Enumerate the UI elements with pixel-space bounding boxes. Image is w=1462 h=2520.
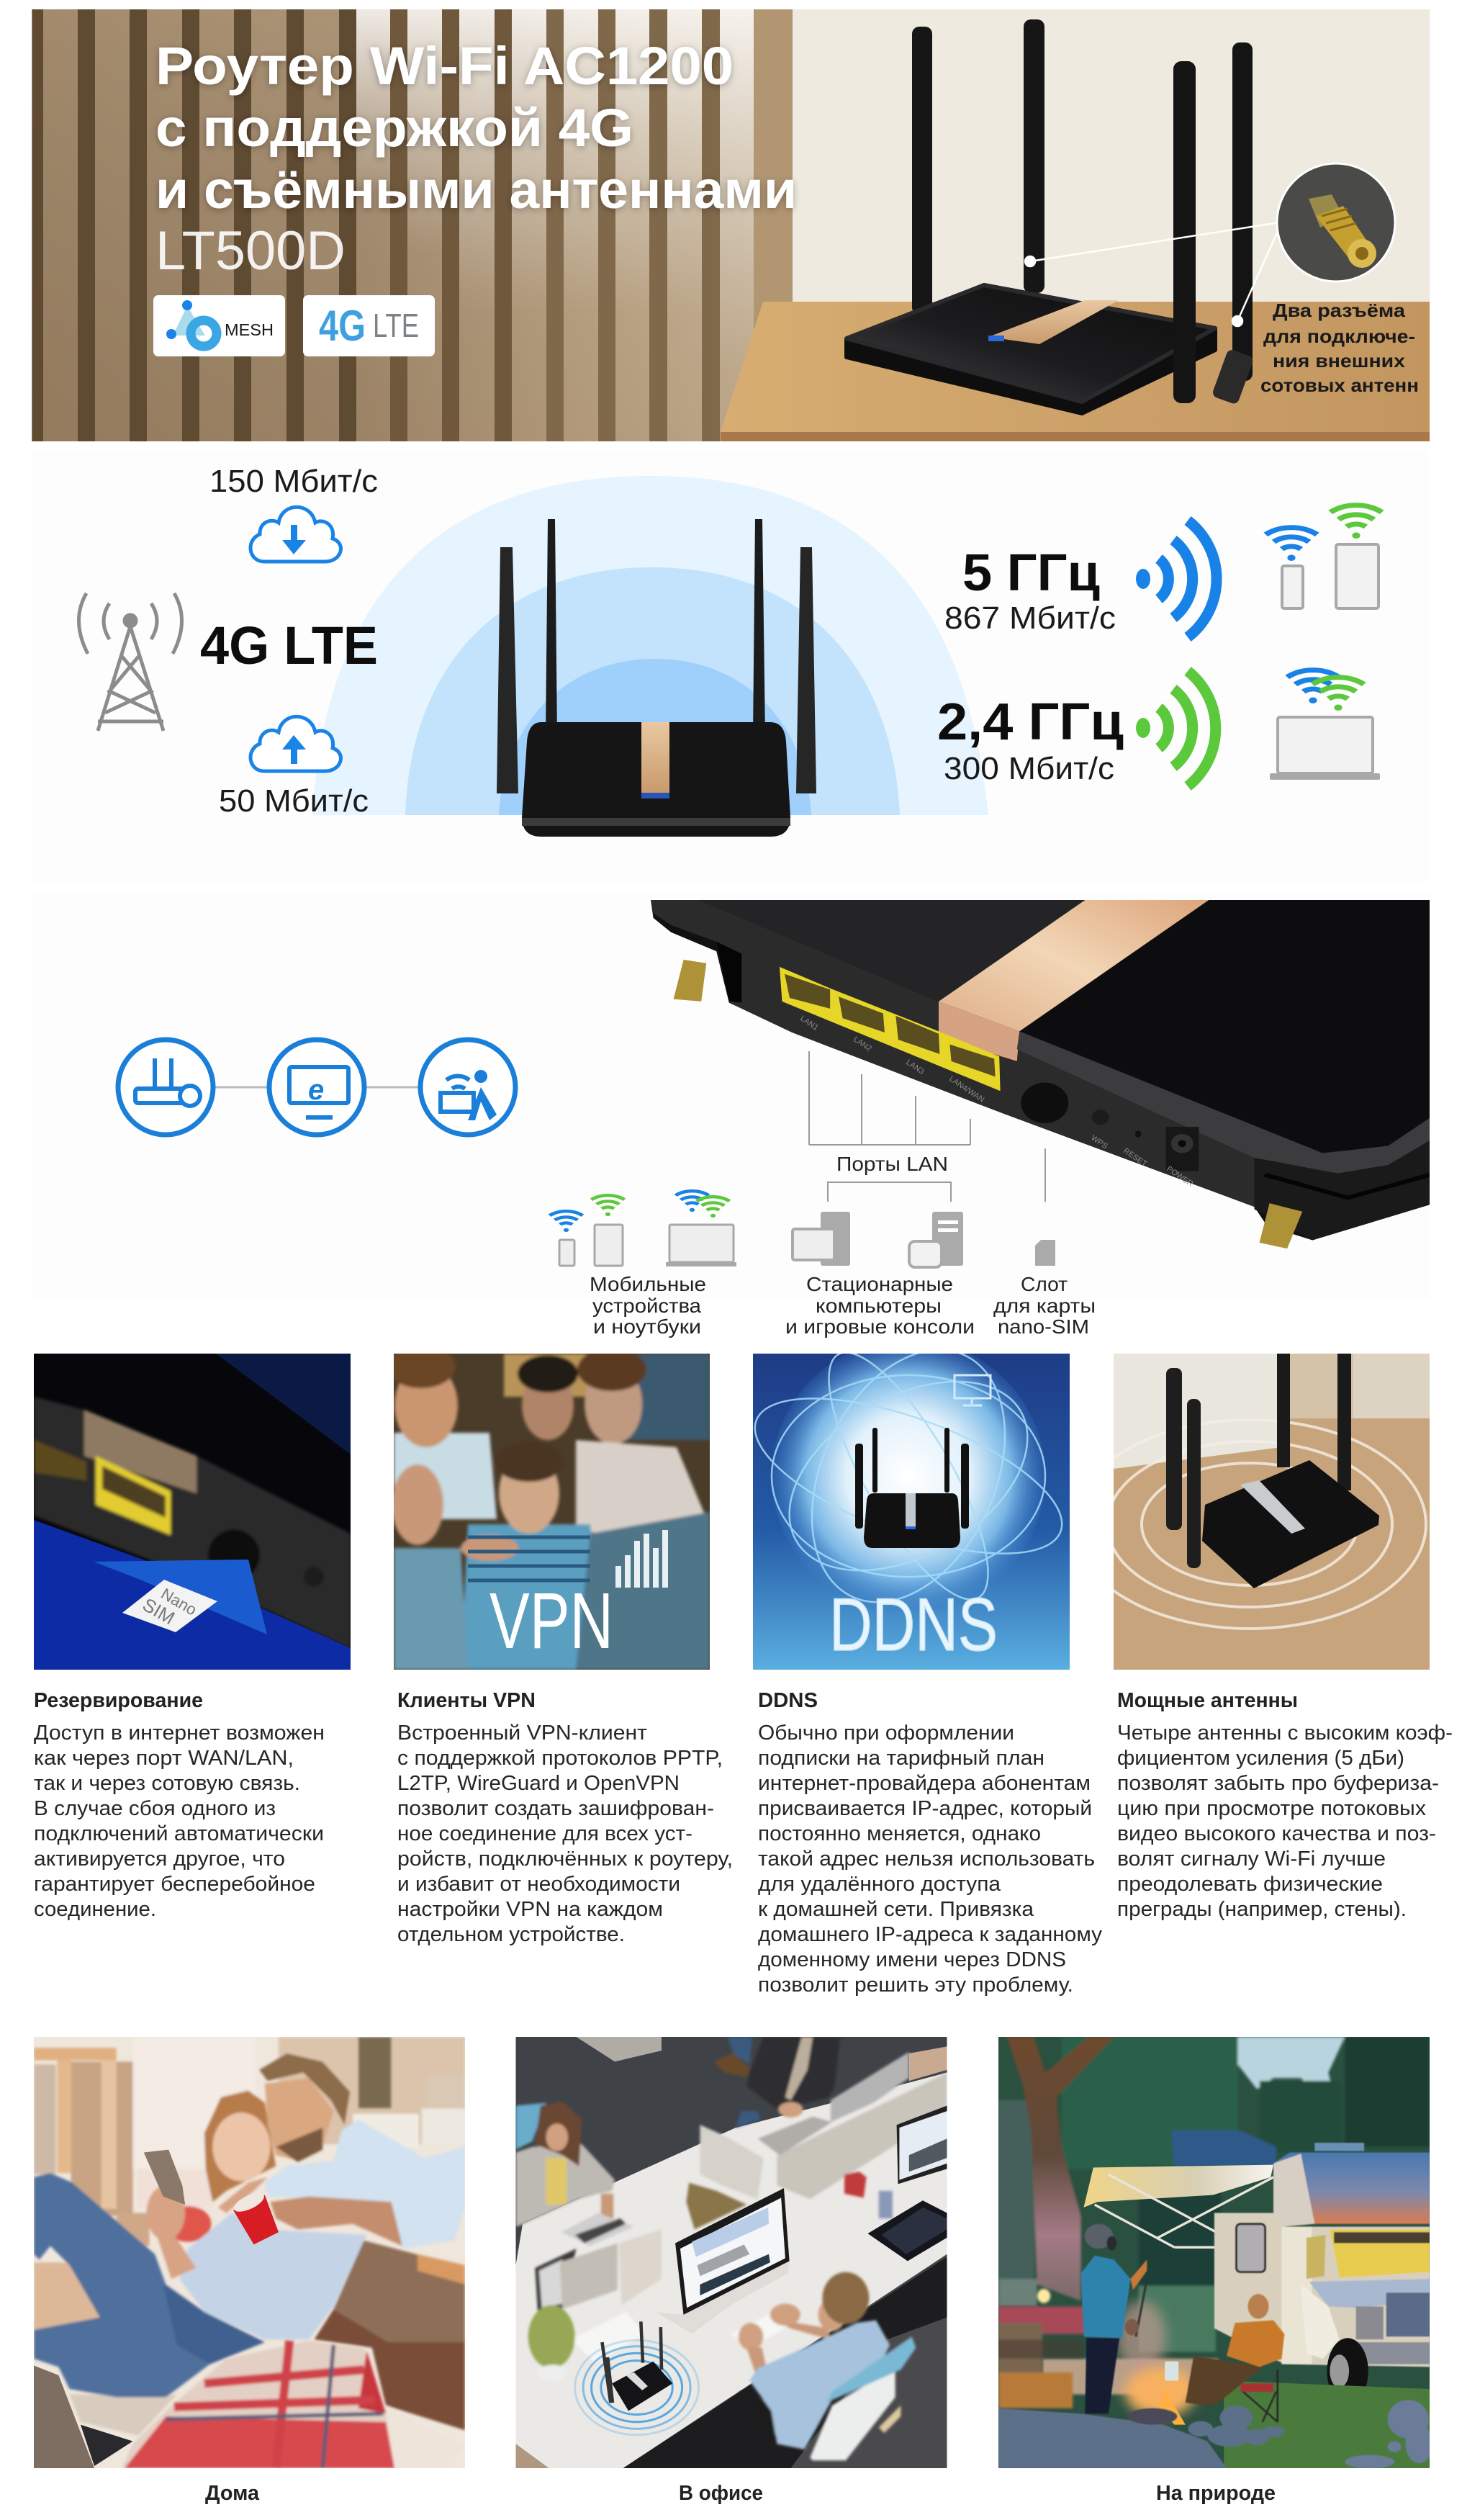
text block: VPN clients: L2TP, WireGuard и OpenVPN	[397, 1772, 680, 1795]
case labels	[798, 1014, 1195, 1189]
text block: backup: Доступ в интернет возможен	[34, 1722, 325, 1745]
text: VPN: VPN	[489, 1577, 613, 1665]
label: 5 GHz: 5 ГГц	[962, 544, 1100, 602]
text block: DDNS: позволит решить эту проблему.	[758, 1974, 1073, 1997]
image: nano SIM close-up	[34, 1354, 351, 1670]
callout text: ния внешних	[1273, 350, 1406, 372]
grass	[1224, 2381, 1430, 2468]
panel: hero banner	[32, 9, 1430, 441]
icon: cell tower	[78, 593, 182, 731]
router rear face	[34, 1397, 351, 1649]
badge: 4G LTE	[303, 295, 435, 356]
label: 4G LTE: 4G LTE	[200, 616, 378, 675]
icon: download cloud	[251, 507, 340, 562]
icons: desktop and console	[793, 1212, 963, 1267]
caption: home: Дома	[205, 2482, 260, 2505]
label: 5 GHz	[944, 544, 1116, 636]
panel: ports	[33, 893, 1430, 1338]
campfire	[1116, 2301, 1196, 2425]
labels: mobile devices: Мобильные	[590, 1273, 706, 1295]
labels: desktop	[785, 1273, 975, 1338]
hero table	[721, 302, 1430, 441]
case labels: LAN4/WAN	[947, 1075, 985, 1104]
icon: upload cloud	[251, 716, 340, 771]
rocks	[998, 2400, 1433, 2469]
text: DDNS: DDNS	[829, 1583, 998, 1667]
text block: DDNS: Обычно при оформлении	[758, 1722, 1014, 1745]
gold strip	[939, 900, 1209, 1061]
office scene	[515, 2037, 947, 2381]
text block: antennas: цию при просмотре потоковых	[1117, 1797, 1427, 1820]
text block: DDNS: присваивается IP-адрес, который	[758, 1797, 1092, 1820]
text block: backup: подключений автоматически	[34, 1822, 324, 1845]
text block: antennas: позволят забыть про буфериза-	[1117, 1772, 1439, 1795]
caption: office: В офисе	[679, 2482, 763, 2505]
text block: backup: Резервирование	[34, 1689, 203, 1712]
hero wood slats	[32, 9, 793, 441]
blue light beam	[94, 1560, 267, 1634]
corner wedge	[716, 942, 741, 1003]
gold connectors	[674, 960, 1302, 1248]
couple scene	[34, 2037, 465, 2468]
tablet and second monitor	[867, 2106, 947, 2261]
text block: VPN clients: ное соединение для всех уст-	[397, 1822, 692, 1845]
campsite scene	[998, 2037, 1430, 2395]
plaid pillow	[122, 2341, 394, 2468]
label: 2.4 GHz: 2,4 ГГц	[937, 693, 1124, 751]
router front view	[497, 519, 816, 837]
labels: SIM slot: nano-SIM	[998, 1315, 1089, 1338]
front wheel	[1327, 2338, 1368, 2404]
nano SIM card: Nano	[158, 1585, 200, 1619]
image: DDNS	[753, 1354, 1070, 1670]
metal rim	[1017, 1031, 1430, 1174]
signal rings	[1073, 1420, 1426, 1629]
text block: VPN clients: с поддержкой протоколов PPTP,	[397, 1747, 723, 1770]
text block: antennas: волят сигналу Wi-Fi лучше	[1117, 1848, 1386, 1871]
label: 5 GHz: 867 Мбит/с	[944, 600, 1116, 636]
man at desk	[730, 2272, 916, 2460]
labels: SIM slot: для карты	[993, 1295, 1096, 1317]
case labels: LAN2	[852, 1035, 873, 1053]
case labels: LAN1	[798, 1014, 820, 1032]
text block: antennas: фициентом усиления (5 дБи)	[1117, 1747, 1404, 1770]
text block: DDNS: к домашней сети. Привязка	[758, 1898, 1034, 1921]
motorhome	[1214, 2143, 1430, 2367]
icon: nano SIM	[1035, 1240, 1055, 1266]
title	[155, 36, 797, 220]
photo background	[394, 1354, 710, 1670]
shirt stripes and chart bars	[468, 1530, 668, 1588]
text block: DDNS: для удалённого доступа	[758, 1873, 1001, 1896]
big monitor	[656, 2188, 790, 2334]
blue floor	[34, 1520, 351, 1670]
nano SIM card: SIM	[139, 1593, 179, 1629]
panel background	[33, 450, 1430, 882]
text block: DDNS: такой адрес нельзя использовать	[758, 1848, 1095, 1871]
text block: antennas: Мощные антенны	[1117, 1689, 1298, 1712]
icon: laptop	[1270, 670, 1380, 780]
labels: desktop: компьютеры	[816, 1295, 942, 1317]
text block: VPN clients: Клиенты VPN	[397, 1689, 536, 1712]
rear face	[651, 900, 1255, 1207]
small router	[855, 1428, 969, 1548]
title: Роутер Wi-Fi AC1200	[155, 36, 734, 96]
panel background	[33, 893, 1430, 1300]
labels: mobile devices: и ноутбуки	[593, 1315, 701, 1338]
text block: VPN clients: настройки VPN на каждом	[397, 1898, 663, 1921]
picnic table and chair	[998, 2289, 1088, 2408]
photo: office	[515, 2037, 947, 2468]
labels: SIM slot	[993, 1273, 1096, 1338]
text block: antennas: преодолевать физические	[1117, 1873, 1383, 1896]
photo background	[34, 1354, 351, 1670]
case labels: RESET	[1122, 1147, 1149, 1169]
image: VPN	[394, 1354, 710, 1670]
yellow LAN ports	[780, 967, 1001, 1091]
white desk	[515, 2046, 947, 2468]
icon set: circles: e	[308, 1074, 324, 1106]
text block: antennas: видео высокого качества и поз-	[1117, 1822, 1436, 1845]
text block: backup: гарантирует бесперебойное	[34, 1873, 315, 1896]
red mug	[231, 2190, 279, 2244]
text block: backup: как через порт WAN/LAN,	[34, 1747, 294, 1770]
monitor icon	[955, 1375, 991, 1405]
text block: antennas: преграды (например, стены).	[1117, 1898, 1407, 1921]
coverage domes	[312, 476, 988, 815]
text block: DDNS: DDNS	[758, 1689, 818, 1712]
router rear close-up	[651, 900, 1430, 1248]
icon set: circles	[118, 1040, 515, 1135]
text block: antennas	[1117, 1689, 1453, 1921]
room background	[34, 2037, 465, 2468]
top panel left	[699, 900, 1085, 1002]
text block: backup: В случае сбоя одного из	[34, 1797, 276, 1820]
text block: backup: соединение.	[34, 1898, 156, 1921]
photo background	[1114, 1354, 1430, 1670]
text block: DDNS: доменному имени через DDNS	[758, 1948, 1066, 1971]
hero wall background	[32, 9, 1430, 441]
badge: 4G LTE: 4G	[319, 302, 366, 350]
awning	[1083, 2165, 1273, 2247]
text block: DDNS: постоянно меняется, однако	[758, 1822, 1041, 1845]
case labels: WPS	[1089, 1134, 1109, 1151]
labels: SIM slot: Слот	[1021, 1273, 1068, 1295]
text block: DDNS: домашнего IP-адреса к заданному	[758, 1923, 1103, 1946]
router with antennas	[1166, 1354, 1379, 1588]
text block: backup: так и через сотовую связь.	[34, 1772, 300, 1795]
icon: blue wifi signal	[1136, 521, 1217, 637]
lines and label: LAN ports	[809, 1051, 1045, 1202]
router base	[651, 900, 1430, 1241]
caption: nature: На природе	[1156, 2482, 1276, 2505]
icon: green wifi signal	[1136, 671, 1216, 786]
title: и съёмными антеннами	[155, 160, 797, 220]
hero router with antennas	[847, 19, 1254, 413]
text block: DDNS: интернет-провайдера абонентам	[758, 1772, 1091, 1795]
callout text	[1260, 300, 1419, 396]
text block: backup	[34, 1689, 325, 1921]
title: с поддержкой 4G	[155, 98, 633, 158]
photo: nature	[998, 2037, 1430, 2468]
badge: mesh: MESH	[225, 320, 274, 339]
text: upload speed: 50 Мбит/с	[219, 783, 369, 819]
text block: DDNS: подписки на тарифный план	[758, 1747, 1044, 1770]
standing person	[1081, 2224, 1147, 2413]
panel: wireless speeds	[33, 450, 1430, 882]
badge: mesh	[153, 295, 285, 356]
icon: phone and tablet	[1265, 505, 1382, 608]
lines and label: LAN ports: Порты LAN	[836, 1153, 948, 1175]
top panel right	[1019, 900, 1430, 1154]
network globe	[736, 1319, 1080, 1633]
callout text: Два разъёма	[1273, 300, 1406, 321]
carpet background	[515, 2037, 947, 2468]
labels: mobile devices: устройства	[592, 1295, 701, 1317]
photo background	[753, 1354, 1070, 1670]
router on desk	[575, 2321, 699, 2435]
background trees and sky	[998, 2037, 1430, 2468]
text block: antennas: Четыре антенны с высоким коэф-	[1117, 1722, 1453, 1745]
case labels: LAN3	[904, 1058, 926, 1076]
lower corner	[1255, 1140, 1430, 1241]
text block: DDNS	[758, 1689, 1103, 1997]
seated person	[1186, 2294, 1284, 2422]
icon: gold connector magnifier	[1277, 163, 1395, 282]
case labels: POWER	[1165, 1165, 1195, 1189]
connector callout lines	[1025, 222, 1279, 326]
text block: VPN clients: Встроенный VPN-клиент	[397, 1722, 647, 1745]
icons: mobile devices	[550, 1191, 736, 1266]
text block: VPN clients: позволит создать зашифрован-	[397, 1797, 714, 1820]
labels: desktop: и игровые консоли	[785, 1315, 975, 1338]
laptop	[34, 2366, 133, 2468]
text block: backup: активируется другое, что	[34, 1848, 285, 1871]
labels: desktop: Стационарные	[806, 1273, 953, 1295]
photo: home	[34, 2037, 465, 2468]
model name: LT500D	[155, 220, 346, 282]
text block: VPN clients: отдельном устройстве.	[397, 1923, 625, 1946]
text block: VPN clients	[397, 1689, 733, 1946]
text block: VPN clients: ройств, подключённых к роутеру,	[397, 1848, 733, 1871]
labels: mobile devices	[590, 1273, 706, 1338]
SIM slot, buttons, power jack	[1021, 1083, 1199, 1171]
badge: 4G LTE: LTE	[373, 307, 419, 344]
text: download speed: 150 Мбит/с	[209, 464, 378, 499]
image: powerful antennas	[1114, 1354, 1430, 1670]
callout text: сотовых антенн	[1260, 374, 1419, 396]
phone	[144, 2150, 185, 2205]
callout text: для подключе-	[1263, 325, 1415, 347]
label: 2.4 GHz	[937, 693, 1124, 786]
text block: VPN clients: и избавит от необходимости	[397, 1873, 680, 1896]
label: 2.4 GHz: 300 Мбит/с	[944, 751, 1114, 786]
people and screens	[387, 1345, 710, 1670]
nano SIM card	[122, 1580, 217, 1632]
